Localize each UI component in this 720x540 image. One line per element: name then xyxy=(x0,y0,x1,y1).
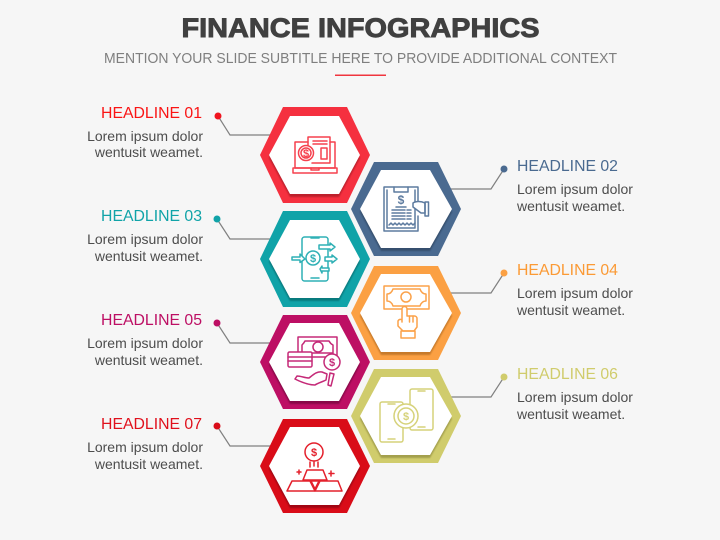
headline 04 text: HEADLINE 04 xyxy=(517,262,618,279)
icon: laptop with invoice xyxy=(293,137,337,173)
headline 03 hexagon xyxy=(260,211,370,307)
headline 05 text: HEADLINE 05 xyxy=(101,312,202,329)
headline 01 text: HEADLINE 01 xyxy=(101,105,202,122)
headline 06 text: HEADLINE 06 xyxy=(517,366,618,383)
headline 02 hexagon xyxy=(351,162,461,256)
icon: laptop with invoice: $ xyxy=(303,148,309,160)
headline 01 text: wentusit weamet. xyxy=(94,144,203,160)
panel: headline 04 xyxy=(351,262,633,360)
icon: gold bars and coin: $ xyxy=(311,447,317,459)
headline 05 text: Lorem ipsum dolor xyxy=(87,335,203,351)
headline 04 text xyxy=(516,262,633,318)
icon: cash, card and hand: $ xyxy=(329,357,335,369)
icon: phone with money transfer xyxy=(292,237,337,281)
headline 04 connector xyxy=(450,270,508,293)
icon: receipt and hand xyxy=(384,187,428,231)
headline 02 text: wentusit weamet. xyxy=(516,198,625,214)
headline 06 text xyxy=(516,366,633,422)
headline 04 hexagon xyxy=(351,266,461,360)
panel: headline 01 xyxy=(87,105,370,203)
headline 01 text: Lorem ipsum dolor xyxy=(87,128,203,144)
headline 05 hexagon xyxy=(260,315,370,409)
subtitle: MENTION YOUR SLIDE SUBTITLE HERE TO PROVIDE ADDITIONAL CONTEXT xyxy=(104,51,617,67)
headline 07 text xyxy=(87,416,203,472)
headline 03 connector xyxy=(214,216,272,239)
panel: headline 06 xyxy=(351,366,633,463)
headline 06 connector xyxy=(450,374,508,397)
headline 05 text: wentusit weamet. xyxy=(94,352,203,368)
headline 04 text: Lorem ipsum dolor xyxy=(517,285,633,301)
headline 02 text xyxy=(516,158,633,214)
icon: two phones exchanging money: $ xyxy=(403,411,409,423)
headline 04 text: wentusit weamet. xyxy=(516,302,625,318)
headline 02 connector xyxy=(450,166,508,189)
headline 07 text: HEADLINE 07 xyxy=(101,416,202,433)
title underline xyxy=(335,74,386,76)
panel: headline 07 xyxy=(87,416,370,513)
headline 03 text xyxy=(87,208,203,264)
title: FINANCE INFOGRAPHICS xyxy=(182,13,540,43)
headline 07 connector xyxy=(214,422,272,446)
icon: receipt and hand: $ xyxy=(398,193,405,207)
headline 07 text: wentusit weamet. xyxy=(94,456,203,472)
headline 02 text: Lorem ipsum dolor xyxy=(517,181,633,197)
icon: banknote and pointing hand xyxy=(384,286,429,338)
headline 06 hexagon xyxy=(351,369,461,463)
panel: headline 03 xyxy=(87,208,370,307)
icon: two phones exchanging money xyxy=(380,389,433,442)
headline 07 hexagon xyxy=(260,419,370,513)
headline 05 text xyxy=(87,312,203,368)
headline 03 text: HEADLINE 03 xyxy=(101,208,202,225)
headline 06 text: wentusit weamet. xyxy=(516,406,625,422)
headline 01 hexagon xyxy=(260,107,370,203)
headline 05 connector xyxy=(214,320,272,343)
headline 03 text: wentusit weamet. xyxy=(94,248,203,264)
icon: gold bars and coin xyxy=(287,443,342,491)
headline 01 connector xyxy=(214,112,272,135)
headline 02 text: HEADLINE 02 xyxy=(517,158,618,175)
headline 01 text xyxy=(87,105,203,160)
icon: phone with money transfer: $ xyxy=(310,253,316,265)
panel: headline 02 xyxy=(351,158,633,256)
headline 06 text: Lorem ipsum dolor xyxy=(517,389,633,405)
icon: cash, card and hand xyxy=(288,337,340,386)
headline 03 text: Lorem ipsum dolor xyxy=(87,231,203,247)
headline 07 text: Lorem ipsum dolor xyxy=(87,439,203,455)
panel: headline 05 xyxy=(87,312,370,409)
